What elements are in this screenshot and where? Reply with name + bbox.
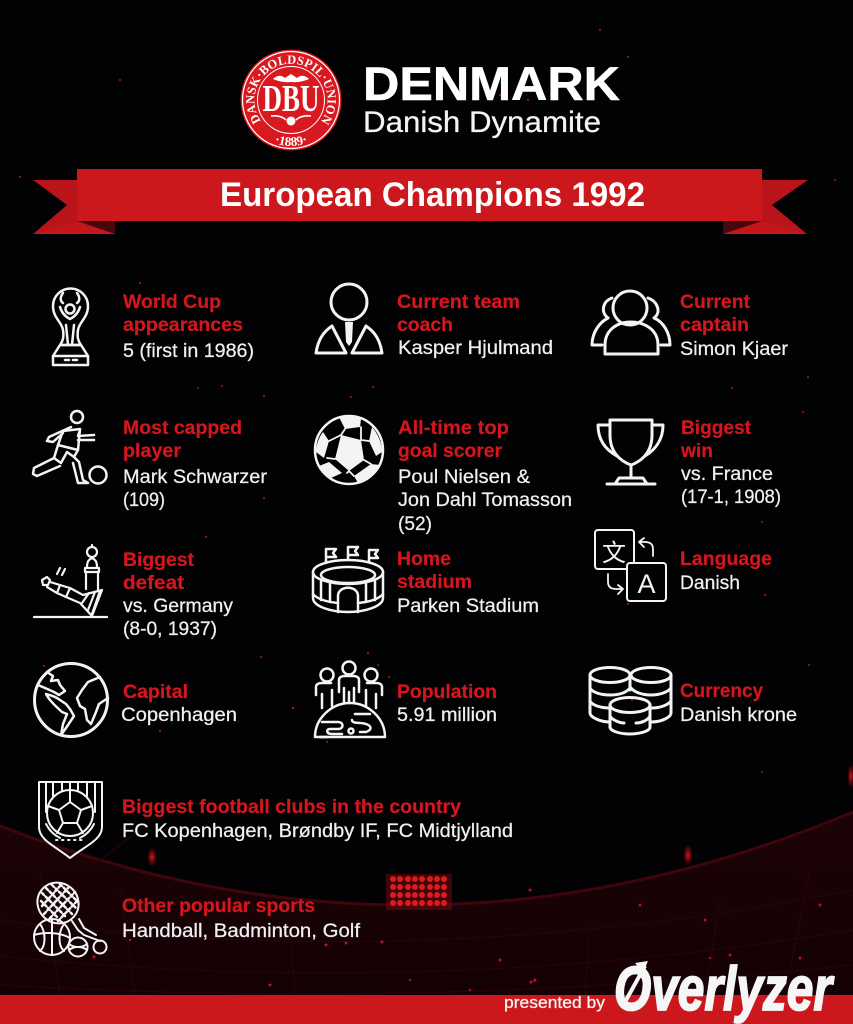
item: Capital bbox=[34, 664, 237, 736]
icon: World Cup trophy bbox=[53, 288, 88, 365]
text: Current captain bbox=[680, 292, 789, 360]
icon: globe bbox=[34, 664, 108, 736]
title: DENMARK: DENMARK bbox=[363, 57, 620, 110]
item: World Cup appearances bbox=[53, 288, 254, 365]
text: All-time top goal scorer: Poul Nielsen & bbox=[398, 467, 530, 488]
icon: people on globe bbox=[315, 662, 385, 737]
icon: translate bbox=[595, 530, 666, 601]
item: Home stadium bbox=[313, 547, 539, 617]
icon: coach bbox=[316, 284, 382, 353]
text: Other popular sports: Other popular sports bbox=[122, 896, 315, 917]
text: World Cup appearances: appearances bbox=[123, 315, 243, 336]
item: Biggest football clubs bbox=[39, 782, 513, 858]
text: Biggest win: vs. France bbox=[681, 464, 773, 485]
text: Biggest win bbox=[680, 418, 781, 508]
text: Currency: Danish krone bbox=[680, 705, 797, 726]
icon: stadium bbox=[313, 547, 383, 612]
text: Language bbox=[680, 549, 772, 594]
text: Most capped player: player bbox=[123, 441, 182, 462]
text: Biggest football clubs: Biggest football clubs in the country bbox=[122, 797, 461, 818]
text: Home stadium: Parken Stadium bbox=[397, 596, 539, 617]
text: All-time top goal scorer bbox=[398, 418, 572, 535]
floodlight panel bbox=[386, 874, 452, 910]
ribbon banner bbox=[33, 169, 808, 234]
text: Currency bbox=[680, 681, 797, 726]
text: Home stadium: Home bbox=[397, 549, 451, 570]
text: World Cup appearances: 5 (first in 1986) bbox=[123, 341, 254, 362]
text: Current captain: captain bbox=[680, 315, 749, 336]
text: Other popular sports: Handball, Badminton, Golf bbox=[122, 921, 361, 942]
text: Current team coach: coach bbox=[397, 315, 453, 336]
text: Biggest defeat bbox=[123, 550, 233, 640]
text: All-time top goal scorer: goal scorer bbox=[398, 441, 503, 462]
item: Most capped player bbox=[33, 411, 268, 511]
text: Current team coach: Kasper Hjulmand bbox=[398, 338, 553, 359]
text: All-time top goal scorer: (52) bbox=[398, 514, 432, 535]
item: Current team coach bbox=[316, 284, 553, 359]
text: Capital bbox=[121, 682, 237, 726]
footer: presented by: presented by bbox=[504, 993, 606, 1012]
item: Biggest win bbox=[598, 418, 781, 508]
logo: DBU crest: ·1889· bbox=[276, 136, 306, 146]
footer bar bbox=[0, 995, 853, 1024]
item: Current captain bbox=[592, 291, 789, 360]
text: Current team coach: Current team bbox=[397, 292, 520, 313]
icon: sports equipment bbox=[29, 874, 107, 956]
item: Population bbox=[315, 662, 497, 737]
text: Other popular sports bbox=[122, 896, 361, 942]
text: Capital: Copenhagen bbox=[121, 705, 237, 726]
text: Biggest football clubs bbox=[122, 797, 513, 842]
text: Population: 5.91 million bbox=[397, 705, 497, 726]
text: Language: Danish bbox=[680, 573, 740, 594]
item: Biggest defeat bbox=[34, 545, 233, 640]
logo: DBU crest bbox=[240, 50, 342, 150]
text: Biggest defeat: vs. Germany bbox=[123, 596, 233, 617]
text: World Cup appearances bbox=[123, 292, 254, 362]
text: Biggest defeat: (8-0, 1937) bbox=[123, 619, 217, 640]
text: Biggest win: win bbox=[680, 441, 713, 462]
banner heading: European Champions 1992 bbox=[220, 176, 645, 214]
icon: translate: A bbox=[637, 569, 656, 599]
text: Population bbox=[397, 682, 497, 726]
text: Most capped player: Mark Schwarzer bbox=[123, 467, 268, 488]
item: Language bbox=[595, 530, 772, 601]
logo: DBU crest: DBU bbox=[262, 78, 320, 120]
text: Home stadium bbox=[397, 549, 539, 617]
icon: translate: 文 bbox=[602, 540, 626, 567]
icon: coin stacks bbox=[590, 668, 671, 734]
text: Biggest win: Biggest bbox=[681, 418, 752, 439]
text: Most capped player: (109) bbox=[123, 490, 165, 511]
text: Most capped player: Most capped bbox=[123, 418, 242, 439]
text: All-time top goal scorer: All-time top bbox=[398, 418, 509, 439]
item: Other popular sports bbox=[29, 874, 361, 956]
text: Biggest win: (17-1, 1908) bbox=[681, 487, 781, 508]
text: Currency: Currency bbox=[680, 681, 763, 702]
logo: DBU crest: DANSK·BOLDSPIL·UNION bbox=[246, 56, 336, 126]
text: Current captain: Current bbox=[680, 292, 751, 313]
icon: club crest bbox=[39, 782, 102, 858]
text: Biggest football clubs: FC Kopenhagen, Brøndby IF, FC Midtjylland bbox=[122, 821, 513, 842]
subtitle: Danish Dynamite: Danish Dynamite bbox=[363, 106, 601, 139]
text: Capital: Capital bbox=[123, 682, 188, 703]
item: Currency bbox=[590, 668, 797, 734]
text: Most capped player bbox=[123, 418, 268, 511]
icon: captain group bbox=[592, 291, 670, 354]
icon: fallen chess king bbox=[34, 545, 107, 617]
text: Population: Population bbox=[397, 682, 497, 703]
icon: player kicking ball bbox=[33, 411, 106, 484]
item: All-time top goal scorer bbox=[315, 416, 572, 535]
text: Language: Language bbox=[680, 549, 772, 570]
text: Biggest defeat: Biggest bbox=[123, 550, 195, 571]
text: World Cup appearances: World Cup bbox=[123, 292, 221, 313]
icon: trophy cup bbox=[598, 420, 663, 484]
text: Biggest defeat: defeat bbox=[123, 573, 185, 594]
icon: football bbox=[315, 416, 383, 484]
text: Current captain: Simon Kjaer bbox=[680, 339, 789, 360]
text: All-time top goal scorer: Jon Dahl Tomasson bbox=[398, 490, 572, 511]
text: Current team coach bbox=[397, 292, 553, 359]
text: Home stadium: stadium bbox=[397, 572, 472, 593]
